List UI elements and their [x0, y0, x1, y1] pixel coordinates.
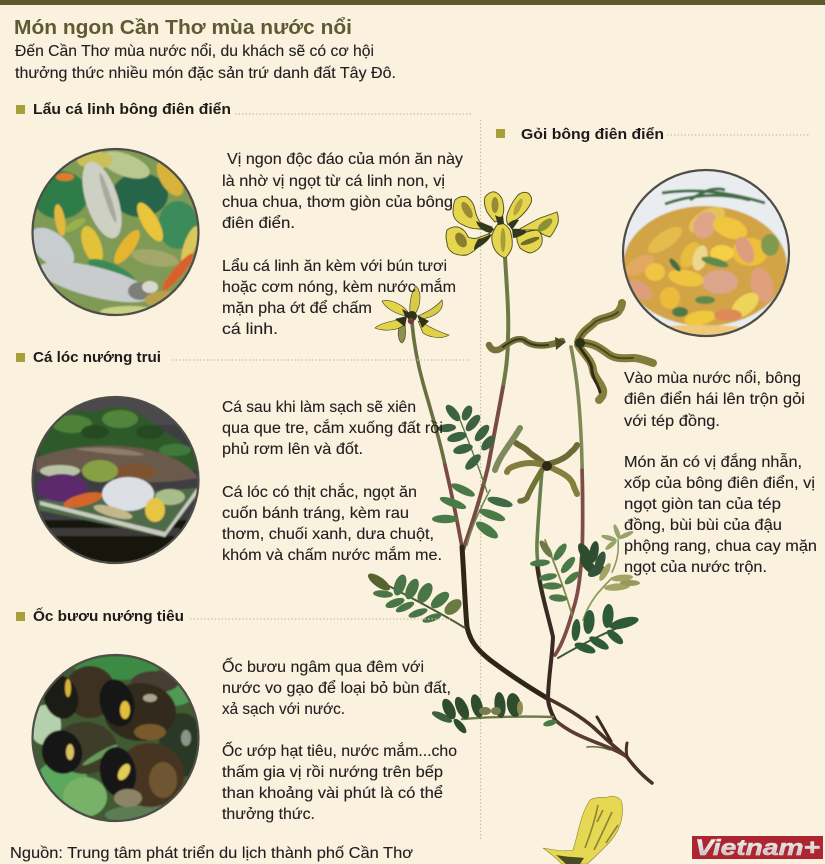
- vertical dotted divider: [480, 120, 482, 840]
- body text: thưởng thức.: [222, 806, 315, 823]
- body text: điên điển.: [222, 214, 295, 232]
- bullet: [16, 353, 25, 362]
- section: Lẩu cá linh bông điên điển: [16, 101, 472, 338]
- stems: [412, 257, 652, 783]
- section: Gỏi bông điên điển: [496, 126, 817, 576]
- photo: hotpot: [22, 146, 202, 319]
- plant illustration: [365, 192, 653, 864]
- body text: chua chua, thơm giòn của bông: [222, 194, 453, 211]
- body text: phủ rơm lên và đốt.: [222, 441, 363, 458]
- leaf spray B: [432, 481, 514, 545]
- body text: Lẩu cá linh ăn kèm với bún tươi: [222, 257, 447, 275]
- body text: với tép đồng.: [624, 413, 720, 430]
- leaf spray G: [431, 692, 558, 735]
- small flower centre: [395, 309, 429, 328]
- top flower shading: [453, 197, 554, 252]
- body text: hoặc cơm nóng, kèm nước mắm: [222, 277, 456, 296]
- heading: Cá lóc nướng trui: [33, 349, 161, 366]
- body text: nước vo gạo để loại bỏ bùn đất,: [222, 679, 451, 697]
- section: Cá lóc nướng trui: [16, 349, 470, 567]
- body text: Vị ngon độc đáo của món ăn này: [227, 151, 463, 168]
- body text: than khoảng vài phút là có thể: [222, 784, 443, 802]
- body text: Cá lóc có thịt chắc, ngọt ăn: [222, 482, 417, 501]
- body text: là nhờ vị ngọt từ cá linh non, vị: [222, 173, 445, 190]
- leaf spray D: [530, 539, 581, 615]
- body text: thấm gia vị rồi nướng trên bếp: [222, 764, 443, 781]
- small flower: [375, 286, 449, 343]
- body text: [222, 656, 457, 823]
- title: Món ngon Cần Thơ mùa nước nổi: [14, 16, 352, 39]
- photo: salad: [620, 168, 792, 340]
- body text: Món ăn có vị đắng nhẫn,: [624, 452, 802, 471]
- body text: khóm và chấm nước mắm me.: [222, 545, 442, 564]
- intro text: thưởng thức nhiều món đặc sản trứ danh đất Tây Đô.: [15, 65, 396, 82]
- section: Ốc bươu nướng tiêu: [16, 607, 457, 825]
- photo: snails: [29, 653, 205, 825]
- photo: grilled fish: [30, 395, 202, 567]
- fallen petal: [543, 796, 622, 864]
- leaf cluster E: [575, 524, 640, 620]
- bullet: [496, 129, 505, 138]
- body text: cuốn bánh tráng, kèm rau: [222, 505, 409, 522]
- body text: Ốc ướp hạt tiêu, nước mắm...cho: [222, 740, 457, 760]
- body text: ngọt của nước trộn.: [624, 559, 767, 576]
- intro text: [15, 42, 396, 82]
- seed pods lower cluster: [507, 443, 577, 501]
- body text: điên điển hái lên trộn gỏi: [624, 390, 805, 408]
- body text: phộng rang, chua cay mặn: [624, 538, 817, 555]
- body text: [222, 399, 443, 564]
- top bar: [0, 0, 825, 5]
- heading rule: [235, 113, 472, 115]
- heading rule: [172, 359, 470, 361]
- body text: cá linh.: [222, 321, 278, 338]
- heading: Gỏi bông điên điển: [521, 126, 664, 143]
- body text: qua que tre, cắm xuống đất rồi: [222, 418, 443, 437]
- leaf spray A: [438, 402, 520, 492]
- body text: thơm, chuối xanh, dưa chuột,: [222, 526, 434, 543]
- body text: ngọt giòn tan của tép: [624, 496, 781, 513]
- body text: [624, 369, 817, 576]
- source line: Nguồn: Trung tâm phát triển du lịch thành phố Cần Thơ: [10, 844, 414, 862]
- intro text: Đến Cần Thơ mùa nước nổi, du khách sẽ có cơ hội: [15, 42, 374, 60]
- bullet: [16, 612, 25, 621]
- top flower: [446, 192, 558, 258]
- seed pods upper cluster: [489, 303, 653, 400]
- body text: Ốc bươu ngâm qua đêm với: [222, 656, 424, 676]
- leaf spray C: [365, 570, 465, 628]
- bullet: [16, 105, 25, 114]
- body text: [222, 151, 463, 338]
- body text: mặn pha ớt để chấm: [222, 299, 372, 317]
- logo: Vietnam+: Vietnam+: [695, 835, 820, 860]
- body text: đồng, bùi bùi của đậu: [624, 517, 782, 534]
- body text: xả sạch với nước.: [222, 701, 345, 718]
- heading rule: [190, 618, 450, 620]
- body text: Cá sau khi làm sạch sẽ xiên: [222, 399, 416, 416]
- body text: Vào mùa nước nổi, bông: [624, 369, 801, 387]
- heading: Lẩu cá linh bông điên điển: [33, 101, 231, 118]
- heading rule: [667, 134, 810, 136]
- heading: Ốc bươu nướng tiêu: [33, 607, 184, 625]
- leaf spray F: [558, 604, 640, 658]
- body text: xốp của bông điên điển, vị: [624, 474, 815, 492]
